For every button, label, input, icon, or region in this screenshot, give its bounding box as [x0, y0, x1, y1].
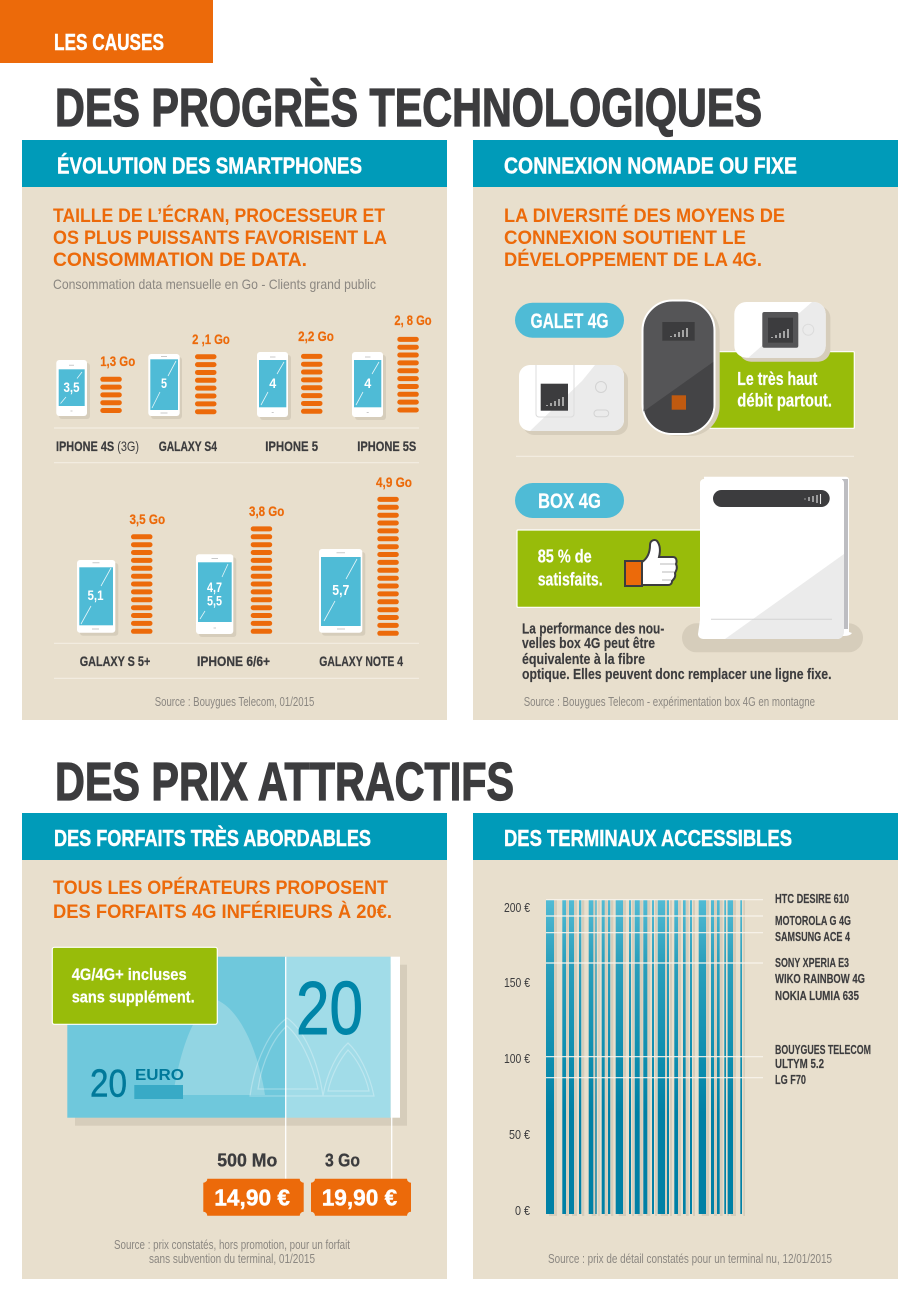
text block: performance: équivalente à la fibre — [522, 652, 645, 668]
subheading — [504, 205, 785, 271]
pill: galet 4G: GALET 4G — [530, 309, 608, 333]
device labels, row 1: GALAXY S4 — [159, 438, 217, 454]
subheading: TOUS LES OPÉRATEURS PROPOSENT — [53, 877, 388, 899]
panel: évolution des smartphones — [22, 140, 447, 720]
data stack 3,8 Go: 3,8 Go — [249, 503, 284, 519]
chart caption: Consommation data mensuelle en Go - Clients grand public — [53, 276, 376, 292]
callout: très haut débit: Le très haut — [737, 369, 817, 389]
device price labels: HTC DESIRE 610 — [775, 892, 849, 906]
device price labels: SONY XPERIA E3 — [775, 956, 849, 970]
item: Galaxy S 5+ — [77, 511, 165, 636]
y axis labels: 150 € — [504, 976, 530, 990]
item: iPhone 6/6+ — [196, 503, 284, 637]
panel header: évolution des smartphones — [22, 140, 447, 187]
data stack 2,1 Go: 2 ,1 Go — [192, 331, 230, 347]
offer: 3 Go: 3 Go — [325, 1150, 360, 1171]
device price labels: MOTOROLA G 4G — [775, 914, 851, 928]
icon: thumbs up — [625, 540, 677, 586]
source — [114, 1238, 350, 1266]
source: Source : Bouygues Telecom - expérimentation box 4G en montagne — [524, 695, 815, 709]
item: Galaxy S4 — [148, 331, 230, 419]
y axis labels: 0 € — [515, 1204, 530, 1218]
device price labels: SAMSUNG ACE 4 — [775, 930, 850, 944]
device price labels: LG F70 — [775, 1073, 806, 1087]
y axis labels: 100 € — [504, 1052, 530, 1066]
subheading: DES FORFAITS 4G INFÉRIEURS À 20€. — [53, 901, 392, 923]
item: Galaxy Note 4 — [319, 474, 412, 636]
pill: galet 4G — [515, 303, 624, 338]
icon: dark pocket router — [642, 300, 720, 436]
pill: box 4G: BOX 4G — [538, 489, 601, 513]
section tab: les causes: LES CAUSES — [54, 29, 164, 55]
icon: phone 5: 5 — [161, 375, 167, 391]
illustration: 20 euro banknote: 20 — [296, 966, 363, 1050]
offer: 500 Mo: 14,90 € — [214, 1184, 290, 1210]
device labels, row 1: IPHONE 4S (3G) — [56, 438, 139, 454]
icon: phone 5,7 — [319, 549, 365, 636]
icon: phone 5,1: 5,1 — [88, 587, 104, 603]
icon: white router left — [519, 365, 628, 435]
text block: performance: La performance des nou- — [522, 621, 664, 637]
data stack 1,3 Go: 1,3 Go — [100, 353, 135, 369]
panel header: connexion nomade ou fixe: CONNEXION NOMADE OU FIXE — [504, 152, 797, 178]
device price labels: BOUYGUES TELECOM — [775, 1043, 871, 1057]
subheading: CONNEXION SOUTIENT LE — [504, 228, 746, 249]
data stack 2,8 Go: 2, 8 Go — [394, 312, 432, 328]
panel header: évolution des smartphones: ÉVOLUTION DES SMARTPHONES — [57, 151, 362, 178]
offer: 3 Go — [311, 1150, 411, 1216]
icon: phone 4: 4 — [364, 375, 371, 391]
source: Source : Bouygues Telecom, 01/2015 — [155, 695, 314, 709]
panel header: des forfaits — [22, 813, 447, 860]
item: iPhone 5S — [352, 312, 432, 420]
callout: très haut débit — [700, 352, 854, 428]
panel: connexion nomade ou fixe — [473, 140, 898, 720]
icon: phone 4,7 / 5,5: 5,5 — [207, 592, 222, 608]
device price labels: ULTYM 5.2 — [775, 1057, 824, 1071]
icon: phone 5,7: 5,7 — [332, 582, 349, 599]
callout: 4G/4G+ incluses: sans supplément. — [72, 988, 195, 1007]
subheading: LA DIVERSITÉ DES MOYENS DE — [504, 205, 785, 227]
callout: très haut débit: débit partout. — [737, 391, 832, 411]
illustration: box 4G router — [682, 477, 863, 652]
device labels, row 2: GALAXY S 5+ — [80, 653, 150, 669]
callout: 4G/4G+ incluses: 4G/4G+ incluses — [72, 965, 187, 984]
y axis labels: 200 € — [504, 901, 530, 915]
item: iPhone 4S — [56, 353, 135, 419]
icon: white router right — [734, 302, 830, 362]
subheading: DÉVELOPPEMENT DE LA 4G. — [504, 249, 762, 271]
callout: 85 % de satisfaits: 85 % de — [538, 547, 592, 567]
data stack 2,2 Go: 2,2 Go — [298, 328, 334, 344]
device labels, row 1 — [56, 438, 416, 454]
callout: 85 % de satisfaits — [517, 530, 707, 607]
item: iPhone 5 — [257, 328, 334, 420]
offer: 500 Mo — [203, 1150, 304, 1216]
illustration: 20 euro banknote: 20 — [90, 1063, 127, 1106]
device price labels: NOKIA LUMIA 635 — [775, 989, 859, 1003]
device price labels — [775, 892, 871, 1087]
device price labels: WIKO RAINBOW 4G — [775, 972, 865, 986]
panel header: des terminaux — [473, 813, 898, 860]
device labels, row 2: GALAXY NOTE 4 — [319, 653, 403, 669]
data stack 4,9 Go — [376, 474, 412, 636]
source: Source : prix de détail constatés pour un terminal nu, 12/01/2015 — [548, 1252, 832, 1266]
pill: box 4G — [515, 483, 624, 518]
offer: 3 Go: 19,90 € — [322, 1184, 397, 1210]
illustration: 20 euro banknote — [67, 957, 407, 1126]
subheading — [53, 877, 392, 923]
device labels, row 2 — [80, 653, 403, 669]
panel header: connexion nomade ou fixe — [473, 140, 898, 187]
panel: des terminaux accessibles — [473, 813, 898, 1279]
subheading: CONSOMMATION DE DATA. — [53, 250, 307, 271]
section tab: les causes — [0, 0, 213, 63]
callout: 4G/4G+ incluses — [52, 947, 217, 1024]
y axis labels: 50 € — [509, 1128, 530, 1142]
offer: 500 Mo: 500 Mo — [217, 1150, 277, 1171]
subheading — [53, 205, 387, 271]
text block: performance — [522, 621, 832, 683]
y axis labels — [504, 901, 530, 1218]
illustration: 20 euro banknote: EURO — [135, 1067, 184, 1084]
icon: phone 4,7 / 5,5 — [196, 554, 236, 637]
panel header: des terminaux: DES TERMINAUX ACCESSIBLES — [504, 825, 792, 851]
device labels, row 1: IPHONE 5S — [357, 438, 416, 454]
callout: 85 % de satisfaits: satisfaits. — [538, 570, 603, 590]
subheading: OS PLUS PUISSANTS FAVORISENT LA — [53, 228, 387, 249]
panel header: des forfaits: DES FORFAITS TRÈS ABORDABLES — [54, 824, 371, 851]
subheading: TAILLE DE L’ÉCRAN, PROCESSEUR ET — [53, 205, 385, 227]
title: des prix attractifs: DES PRIX ATTRACTIFS — [55, 752, 514, 812]
device labels, row 1: IPHONE 5 — [265, 438, 318, 454]
icon: phone 3,5: 3,5 — [64, 379, 80, 395]
source: Source : prix constatés, hors promotion, pour un forfait — [114, 1238, 350, 1252]
icon: phone 4: 4 — [269, 375, 276, 391]
data stack 3,5 Go: 3,5 Go — [129, 511, 165, 527]
text block: performance: velles box 4G peut être — [522, 636, 655, 652]
data stack 4,9 Go: 4,9 Go — [376, 474, 412, 490]
text block: performance: optique. Elles peuvent donc remplacer une ligne fixe. — [522, 667, 832, 683]
source: sans subvention du terminal, 01/2015 — [149, 1252, 315, 1266]
device labels, row 2: IPHONE 6/6+ — [197, 653, 270, 669]
bar chart: terminal prices — [546, 900, 763, 1216]
panel: des forfaits très abordables — [22, 813, 447, 1279]
icon: phone 4,7 / 5,5: 4,7 — [207, 579, 222, 595]
